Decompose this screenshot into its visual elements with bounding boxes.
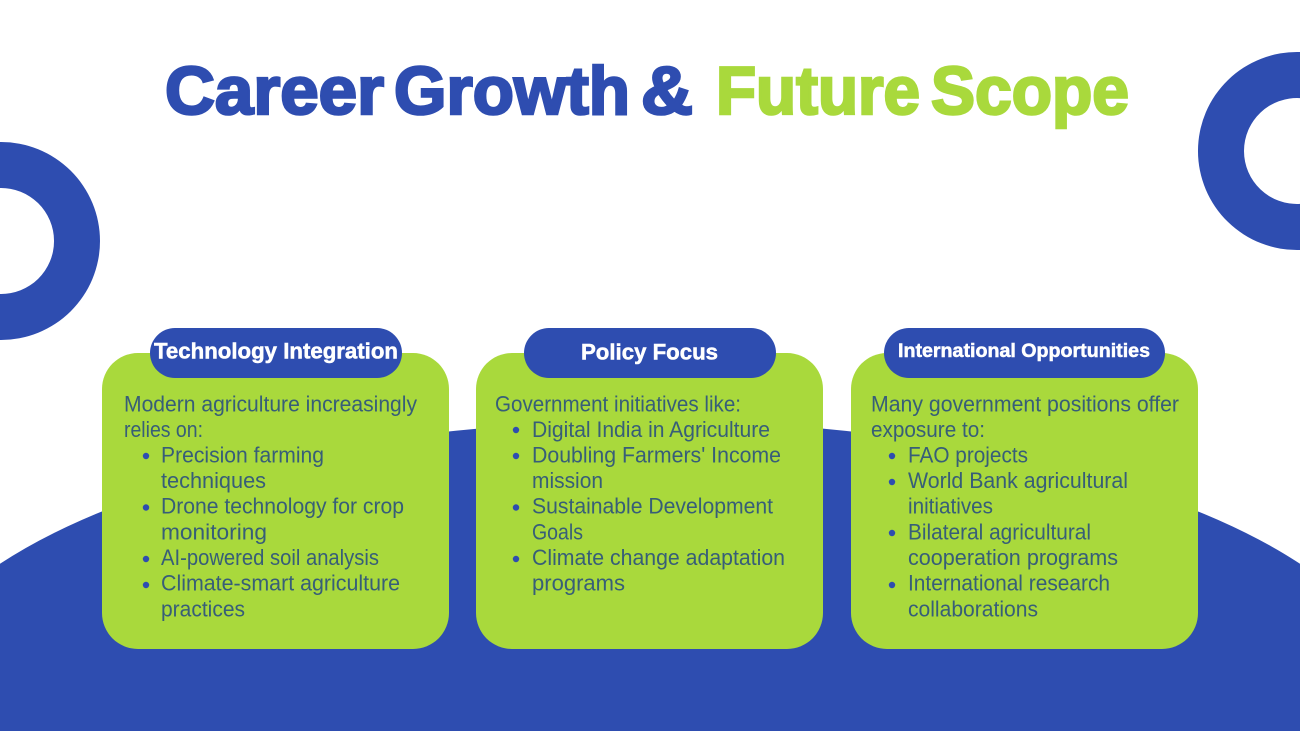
text block: technology list: Drone technology for crop	[161, 494, 404, 518]
text block: technology list	[124, 392, 417, 622]
text block: policy list: Doubling Farmers' Income	[532, 442, 781, 468]
text block: international list: International research	[908, 570, 1110, 596]
text block: technology list: Climate-smart agriculture	[161, 570, 400, 596]
title: &	[641, 53, 693, 129]
text block: international list: Many government positions offer	[871, 392, 1179, 416]
text block: international list: FAO projects	[908, 442, 1028, 468]
decorative ring: left	[0, 142, 100, 340]
text block: international list	[871, 392, 1179, 622]
heading pill: international opportunities: International Opportunities	[898, 341, 1150, 362]
text block: international list: Bilateral agricultural	[908, 520, 1091, 544]
title: Scope	[931, 53, 1129, 129]
text block: policy list: Digital India in Agriculture	[532, 417, 770, 442]
text block: technology list: AI-powered soil analysis	[161, 545, 379, 570]
text block: international list: exposure to:	[871, 417, 985, 442]
panel: policy focus	[476, 328, 823, 649]
text block: international list: World Bank agricultural	[908, 468, 1128, 493]
text block: policy list: mission	[532, 468, 603, 493]
title: Growth	[394, 53, 630, 129]
title: Future	[716, 53, 920, 129]
decorative ring: right	[1198, 52, 1300, 250]
text block: policy list: Climate change adaptation	[532, 545, 785, 570]
heading pill: technology integration: Technology Integration	[154, 338, 398, 364]
heading pill: technology integration	[150, 328, 402, 378]
title	[165, 53, 1129, 129]
text block: international list: cooperation programs	[908, 545, 1118, 570]
text block: technology list: monitoring	[161, 520, 267, 544]
text block: policy list: Government initiatives like:	[495, 392, 741, 416]
text block: policy list: Goals	[532, 520, 583, 544]
heading pill: international opportunities	[884, 328, 1165, 378]
text block: policy list: programs	[532, 570, 625, 596]
panel: international opportunities	[851, 328, 1198, 649]
heading pill: policy focus	[524, 328, 776, 378]
text block: technology list: practices	[161, 596, 245, 622]
background: blue dome	[0, 421, 1300, 731]
text block: policy list: Sustainable Development	[532, 494, 773, 518]
text block: technology list: techniques	[161, 468, 266, 493]
heading pill: policy focus: Policy Focus	[581, 340, 718, 364]
text block: technology list: Precision farming	[161, 442, 324, 468]
text block: international list: collaborations	[908, 596, 1038, 622]
text block: technology list: relies on:	[124, 417, 203, 442]
title: Career	[165, 53, 384, 129]
panel: technology integration	[102, 328, 449, 649]
text block: technology list: Modern agriculture increasingly	[124, 392, 417, 416]
text block: international list: initiatives	[908, 494, 993, 518]
text block: policy list	[495, 392, 785, 596]
